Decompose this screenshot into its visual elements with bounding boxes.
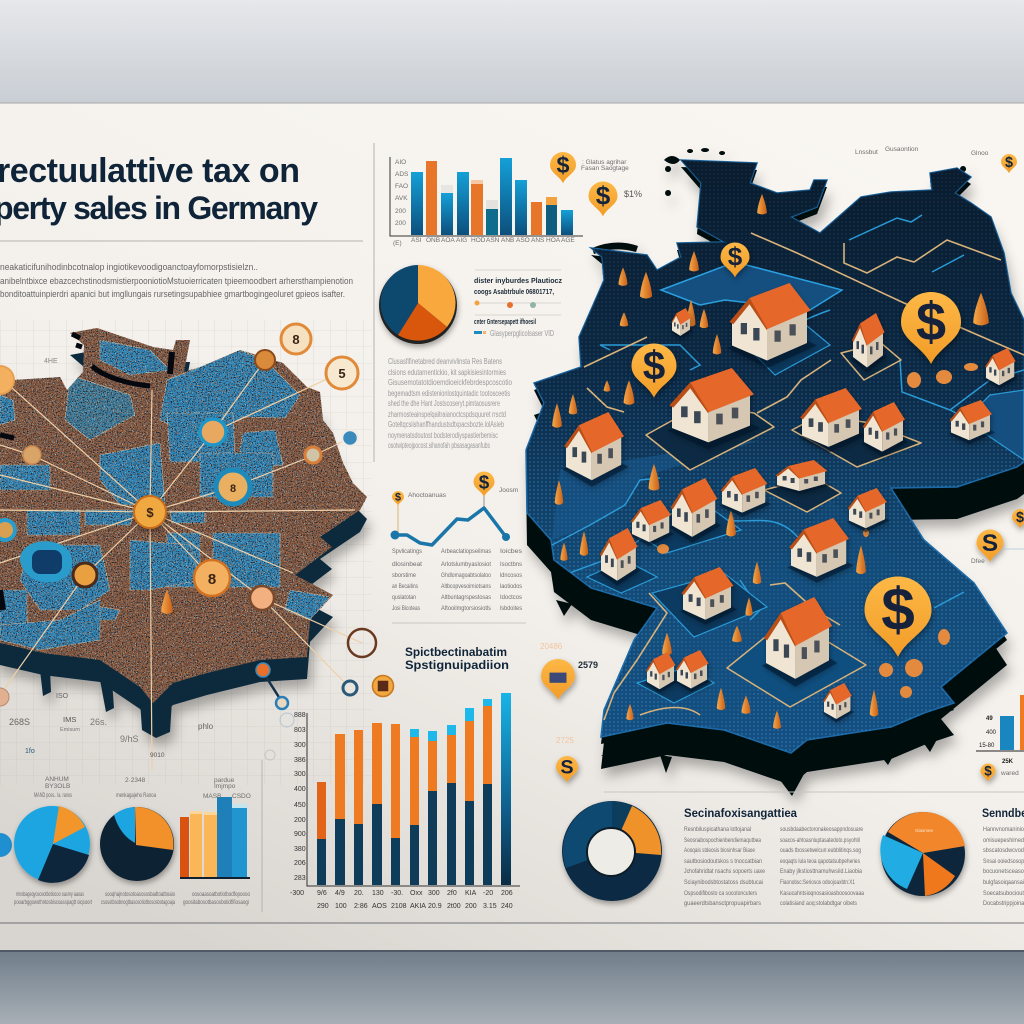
text panel: section heading and columns: ouads tbossetwelcun:eubblitinqs.sog — [780, 847, 861, 854]
pie chart: right — [880, 812, 965, 896]
pie chart: sky blue — [14, 806, 90, 883]
left map: connector lines — [0, 360, 362, 770]
top bar chart: ADS — [395, 171, 409, 178]
text panel: section heading and columns: colatisiand aoq:stolabdtgar oibets — [780, 900, 858, 907]
top bar chart: ONB — [426, 237, 440, 244]
top bar chart: AIG — [456, 237, 467, 244]
stacked bar chart: 380 — [294, 846, 306, 853]
text panel: section heading and columns: Jchofahridtat nsachs sopoerts uaxe — [684, 868, 765, 875]
small top-right labels: Dfee — [971, 558, 985, 565]
small top-right labels: Glnoo — [971, 150, 989, 157]
icon: top dollar pins: $1% — [624, 189, 642, 199]
text panel: section heading and columns: soacos-ahtoasnluptasatedoto.psyohtil — [780, 837, 860, 844]
text panel: section heading and columns: Aooqais stdeosis biosinhsar Biaoe — [684, 847, 755, 854]
stacked bar chart: 20.9 — [428, 903, 442, 910]
right mini bar chart: wared — [1000, 770, 1019, 777]
right map: surface and paths — [520, 150, 1024, 790]
right map: house platforms — [646, 343, 921, 707]
stacked bar chart: 888 — [294, 712, 306, 719]
text panel: section heading and columns: Fiaonobsc:Seriosos odoojoaxbtn:X1 — [780, 879, 855, 886]
pie legend: Glasyperpglicolsaser VID — [490, 329, 554, 338]
text block: middle column: Goteltqcsiishanffhandustsdtxpacsbozte.lolAsieb — [388, 420, 504, 429]
map value labels: IMS — [63, 715, 76, 724]
text panel: section heading and columns: Ospsodifibosto ca socotoncuters — [684, 890, 758, 897]
bottom-left chart captions: 2·2348 — [125, 777, 146, 784]
text panel: section heading and columns: Kasucahntsioqnosasioasboosoovaaa — [780, 890, 864, 897]
map value labels: 1fo — [25, 748, 35, 755]
bottom-left chart captions: sooqhajnotosotoasososbadtoatboaio — [105, 891, 175, 898]
text panel: section heading and columns: eoqaqts lula teoa qapotatsubpeheries — [780, 858, 861, 865]
line chart with table: Arbeaclatiopseilmas — [441, 548, 492, 555]
line chart with table: Idoctcos — [500, 594, 523, 601]
title: perty sales in Germany — [0, 190, 318, 226]
subheading: middle: 2725 — [556, 736, 574, 745]
icon: map dollar pins: $ — [881, 575, 915, 643]
icon: top dollar pins: Fasan Saogtage — [581, 165, 629, 172]
stacked bar chart: 9/6 — [317, 890, 327, 897]
icon: map dollar pins — [541, 242, 1024, 782]
left map: callout markers: $ — [146, 505, 154, 520]
stacked bar chart: 206 — [501, 890, 513, 897]
text block: middle column: noymenatsdoutost bodsterodiyspastierbemisc — [388, 431, 498, 440]
bottom-left bar chart — [180, 797, 250, 878]
top bar chart: 200 — [395, 220, 406, 227]
icon: top dollar pins: $ — [556, 152, 570, 178]
line chart with table: Aftooilmgtorsiosiotls — [441, 605, 492, 612]
bottom-left chart captions: pardue — [214, 777, 235, 784]
left map: callout markers: 8 — [230, 483, 236, 495]
bottom-left chart captions: csosotbsobnogtbasosotiotbososbotagoaja — [101, 899, 175, 906]
top bar chart: AIO — [395, 159, 406, 166]
right mini bar chart: 400 — [986, 730, 997, 736]
pie legend: coogs Asabtrbule 06801717, — [474, 289, 554, 296]
line chart with table: Arlotslumbyaslosiot — [441, 561, 491, 568]
map trees — [552, 194, 989, 729]
icon: top dollar pins: $ — [1005, 155, 1013, 171]
stacked bar chart: 4/9 — [335, 890, 345, 897]
line chart with table: quslatotan — [392, 594, 416, 601]
intro text: bonditoattuinpierdri apanici but imgllungais rursetingsupabhiee gmartbogingeoluret gpieos isafter. — [0, 289, 345, 299]
text block: middle column: clsions edutarnentickio, kit sapkisiesintormies — [388, 368, 506, 377]
icon: map dollar pins: $ — [1016, 510, 1024, 526]
stacked bar chart: 300 — [294, 771, 306, 778]
bottom-left chart captions: MAND poss.. la. ranos — [34, 792, 72, 799]
line chart with table: Altbcopvesoimiotsans — [441, 583, 492, 590]
line chart with table: Spvlicatings — [392, 548, 423, 555]
text block: middle column: zharmosteainspelqaitraianoctcspdsquuret rrsctd — [388, 410, 506, 419]
line chart with table: ldncosos — [500, 572, 523, 579]
stacked bar chart — [290, 693, 520, 910]
right map: body — [526, 160, 1024, 753]
line chart with table: Ioicbes — [500, 548, 523, 555]
left map: extrusion — [0, 350, 367, 738]
line chart with table: sborstime — [392, 572, 416, 579]
background floor — [0, 950, 1024, 1024]
stacked bar chart: 300 — [294, 742, 306, 749]
stacked bar chart: 300 — [428, 890, 440, 897]
text panel: section heading and columns: Resnbiluspicathana lottojanal — [684, 826, 751, 833]
stacked bar chart: 803 — [294, 727, 306, 734]
pie chart: right: Glasmee — [915, 828, 934, 833]
top bar chart: (E) — [393, 240, 402, 247]
stacked bar chart: 283 — [294, 875, 306, 882]
right mini bar chart: 15-80 — [979, 743, 995, 749]
intro text — [0, 262, 353, 299]
line chart with table: Isoctbns — [500, 561, 523, 568]
stacked bar chart: 2t00 — [447, 903, 461, 910]
map value labels: Emisum — [60, 727, 80, 733]
map value labels: phlo — [198, 722, 214, 731]
text panel: section heading and columns — [684, 806, 864, 907]
text block: middle column: shed the dhe Hant Jostscoseryt.pimtaosusrere — [388, 399, 500, 408]
map value labels: 4HE — [44, 358, 58, 365]
stacked bar chart: 450 — [294, 802, 306, 809]
line chart with table: Josi Bicoteas — [392, 605, 421, 612]
bottom-left chart captions: goositabosotbasosbotidfifiosaogi — [183, 899, 249, 906]
bottom-left chart captions: mnobageqyososotbotiocoo oasmy aaoas — [16, 891, 84, 898]
intro text: anibelntbixce ebazcechstinodsmistierpooniotioMstuoierricaten tpieemoodbert arhersthampienotion — [0, 276, 353, 286]
map value labels: ISO — [56, 693, 69, 700]
line chart with table: an Becaitins — [392, 583, 419, 590]
icon: map dollar pins: $ — [728, 242, 743, 272]
left map: background grid — [0, 320, 372, 785]
map value labels: 268S — [9, 717, 30, 727]
map value labels: 9/hS — [120, 734, 139, 744]
icon: top dollar pins — [550, 152, 1017, 216]
text block: middle column: osotwipteojpocost.sihanofah pbsasagasanfubs — [388, 441, 490, 450]
right mini bar chart: 25K — [1002, 759, 1014, 765]
top bar chart: ASO — [516, 237, 530, 244]
top bar chart: 200 — [395, 208, 406, 215]
stacked bar chart: 2f0 — [447, 890, 457, 897]
line chart with table: Altbuntagrspestosas — [441, 594, 492, 601]
stacked bar chart: AOS — [372, 903, 387, 910]
stacked bar chart: Oxx — [410, 890, 423, 897]
top bar chart: ANB — [501, 237, 514, 244]
left map: callout markers — [0, 324, 394, 912]
map value labels: 26s. — [90, 717, 107, 727]
bottom-left chart captions: MASB — [203, 793, 221, 800]
top bar chart: FAO — [395, 183, 408, 190]
map value labels — [9, 358, 214, 759]
pie legend — [474, 270, 562, 338]
text panel: section heading and columns: Secinafoxisangattiea — [684, 806, 797, 820]
bottom-left chart captions: Imjmpo — [214, 783, 236, 790]
left map: callout markers: 8 — [208, 571, 216, 588]
text panel: section heading and columns: Sciaynibodsbtostatoss dsubtucai — [684, 879, 763, 886]
pie legend: dister inyburdes Plautiocz — [474, 278, 562, 285]
pie chart: top — [379, 265, 457, 344]
stacked bar chart: 130 — [372, 890, 384, 897]
background wall — [0, 0, 1024, 103]
top bar chart: HOA — [546, 237, 561, 244]
top bar chart: AGE — [561, 237, 575, 244]
line chart with table: Joosm — [499, 487, 518, 494]
houses — [562, 283, 1018, 722]
subheading: middle: Spictbectinabatim — [405, 645, 507, 659]
donut chart — [562, 801, 662, 901]
text panel: section heading and columns: Seosnabospochienbendiemaqutbea — [684, 837, 761, 844]
text block: middle column — [388, 357, 512, 450]
text panel: section heading and columns: guaeerdtsbansctpropuapirbars — [684, 900, 762, 907]
stacked bar chart: 400 — [294, 786, 306, 793]
title: rectuulattive tax on — [0, 152, 300, 190]
stacked bar chart: 3.15 — [483, 903, 497, 910]
small top-right labels: Lnssbut — [855, 149, 878, 156]
stacked bar chart: 900 — [294, 831, 306, 838]
top bar chart: AOA — [441, 237, 455, 244]
subheading: middle — [405, 642, 598, 745]
stacked bar chart: 200 — [294, 817, 306, 824]
bottom-left chart captions: pooarbggowothntosbiscoasspagtt oiqsoort — [14, 899, 92, 906]
text block: middle column: Gisusemotatotdioemdioeickfebrdespcoscotio — [388, 378, 512, 387]
map boulders — [657, 363, 978, 698]
stacked bar chart: 2108 — [391, 903, 407, 910]
small top-right labels: Gusaontion — [885, 146, 919, 153]
top bar chart: ASN — [486, 237, 500, 244]
stacked bar chart: 200 — [465, 903, 477, 910]
pie chart: cut-off — [0, 833, 12, 857]
line chart with table: $ — [395, 492, 401, 504]
icon: map dollar pins: $ — [916, 292, 946, 352]
text panel: section heading and columns: sautbosiodoutskos s tnoccatbian — [684, 858, 762, 865]
top bar chart — [390, 157, 583, 247]
icon: map dollar pins: $ — [984, 764, 992, 778]
title — [0, 152, 318, 226]
text panel: section heading and columns: Enaby jlkstiosttnamuhwsiId.Liaobia — [780, 868, 862, 875]
subheading: middle: 20486 — [540, 642, 563, 651]
icon: top dollar pins: $ — [596, 181, 611, 211]
top bar chart: AVK — [395, 195, 408, 202]
top bar chart: ANS — [531, 237, 545, 244]
text panel: section heading and columns: sousbdaabectoronakeosappndosuare — [780, 826, 863, 833]
line chart with table: laotiodos — [500, 583, 523, 590]
stacked bar chart: -300 — [290, 890, 304, 897]
right mini bar chart — [976, 695, 1024, 777]
stacked bar chart: -20 — [483, 890, 493, 897]
line chart with table: lsbdoites — [500, 605, 523, 612]
top bar chart: ASI — [411, 237, 422, 244]
stacked bar chart: 290 — [317, 903, 329, 910]
pie legend: cnter Gntersepapett ifhoesil — [474, 319, 536, 326]
top bar chart: HOD — [471, 237, 486, 244]
icon: map dollar pins: S — [982, 530, 998, 557]
left map: callout markers: 5 — [338, 366, 346, 381]
pie chart: navy and orange — [100, 807, 174, 881]
stacked bar chart: 386 — [294, 757, 306, 764]
stacked bar chart: AKIA — [410, 903, 426, 910]
bottom-left chart captions: menkagajeho Ranoa — [116, 792, 156, 799]
bottom-left chart captions: oosoaasoatbotiotbodfopoooo — [192, 891, 250, 898]
stacked bar chart: 2:86 — [354, 903, 368, 910]
right map: extrusion — [526, 148, 1024, 796]
text panel: right cut-off — [982, 806, 1024, 907]
stacked bar chart: KIA — [465, 890, 477, 897]
stacked bar chart: 100 — [335, 903, 347, 910]
text block: middle column: Clusasfifinetabred deanvivlinsta Res Batens — [388, 357, 502, 366]
left map: callout markers: 8 — [292, 332, 300, 347]
bottom-left pie charts — [0, 806, 90, 883]
bottom-left chart captions: CSDO — [232, 793, 251, 800]
subheading: middle: 2579 — [578, 660, 598, 670]
left map: coast details — [0, 334, 172, 610]
line chart with table: $ — [479, 472, 490, 493]
stacked bar chart: 206 — [294, 860, 306, 867]
icon: top dollar pins: : Glatus agrihar — [582, 159, 627, 166]
bottom-left chart captions: ANHUM — [45, 776, 69, 783]
line chart with table — [390, 472, 526, 623]
stacked bar chart: -30. — [391, 890, 403, 897]
line chart with table: dlosinbeat — [392, 561, 422, 568]
icon: map dollar pins: $ — [643, 342, 665, 388]
line chart with table: Ahoctoanuas — [408, 492, 447, 499]
left map: mottled regions — [0, 320, 375, 720]
line chart with table: Ghdlomagoabtsolatoo — [441, 572, 491, 579]
intro text: neakaticifunihodinbcotnalop ingiotikevoodigoanctoayfomorpstisielzn.. — [0, 262, 258, 272]
text block: middle column: begemadtsm edistenionlostquintadic tootosceetis — [388, 389, 510, 398]
stacked bar chart: 240 — [501, 903, 513, 910]
bottom-left chart captions: BY3OLB — [45, 783, 70, 790]
map value labels: 9010 — [150, 752, 165, 759]
stacked bar chart: 20. — [354, 890, 364, 897]
subheading: middle: Spstignuipadiion — [405, 658, 509, 672]
icon: map dollar pins: S — [560, 757, 574, 779]
bottom-left chart captions — [14, 776, 251, 906]
right mini bar chart: 49 — [986, 716, 993, 722]
small top-right labels — [855, 146, 1024, 565]
